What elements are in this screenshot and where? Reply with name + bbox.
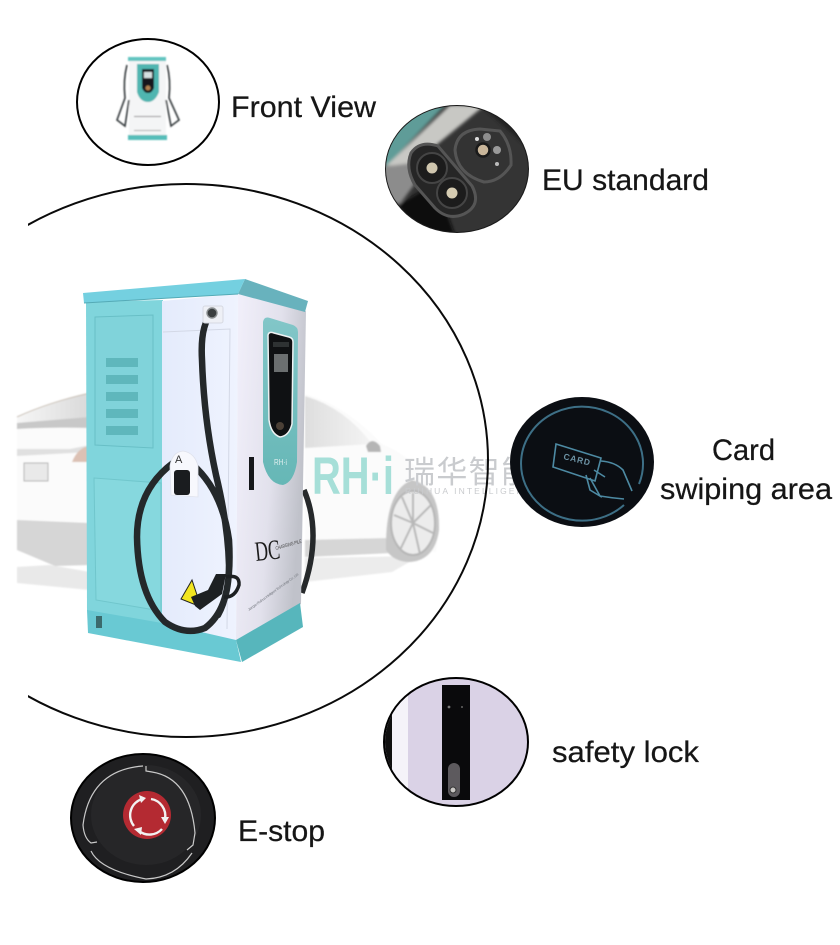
upper door with vents xyxy=(95,315,153,448)
lower door xyxy=(94,478,161,611)
DC logo: CHARGING PILE xyxy=(275,539,303,552)
car front, right of the charger xyxy=(305,394,440,552)
watermark: RUIHUA INTELLIGENT xyxy=(405,486,530,496)
watermark: RH·i xyxy=(312,447,394,506)
cable gland xyxy=(203,306,223,323)
circle: EU standard connector xyxy=(380,100,530,235)
teal front section xyxy=(86,300,163,624)
label: front view: Front View xyxy=(231,91,376,124)
warning sticker xyxy=(181,580,201,607)
DC logo: DC xyxy=(253,535,282,568)
connector plug xyxy=(191,574,226,610)
base xyxy=(236,603,303,662)
connector holder A: A xyxy=(175,454,183,466)
charging cable loop xyxy=(137,313,230,631)
main charging pile xyxy=(83,279,313,662)
white front section xyxy=(162,294,238,641)
circle: card swiping xyxy=(510,397,654,527)
top cap xyxy=(238,279,308,312)
upper connector socket xyxy=(455,129,511,182)
side lock xyxy=(249,457,254,490)
lower connector socket xyxy=(409,144,476,216)
car rear, left of the charger xyxy=(17,393,90,423)
screen panel: RH·i xyxy=(274,458,287,467)
screen panel xyxy=(263,318,298,485)
card icon xyxy=(553,444,632,499)
circle: safety lock xyxy=(384,678,528,806)
label: card swiping area: Card xyxy=(712,434,775,467)
label: safety lock: safety lock xyxy=(552,736,700,769)
circle: card swiping: CARD xyxy=(563,451,591,467)
manufacturer line: Jiangsu Ruihua Intelligent Technology Co., Ltd. xyxy=(247,572,300,612)
background car xyxy=(17,393,440,590)
connector holder A xyxy=(170,451,198,497)
watermark: 瑞华智能 xyxy=(404,455,532,490)
watermark xyxy=(312,447,532,506)
label: E-stop: E-stop xyxy=(238,815,325,848)
side face xyxy=(236,294,306,641)
label: card swiping area xyxy=(660,434,832,506)
large circle outline xyxy=(0,184,488,737)
circle: E-stop xyxy=(71,754,215,882)
back cable xyxy=(302,490,313,593)
circle: front view xyxy=(77,39,219,165)
label: card swiping area: swiping area xyxy=(660,473,832,506)
label: EU standard: EU standard xyxy=(542,164,709,197)
